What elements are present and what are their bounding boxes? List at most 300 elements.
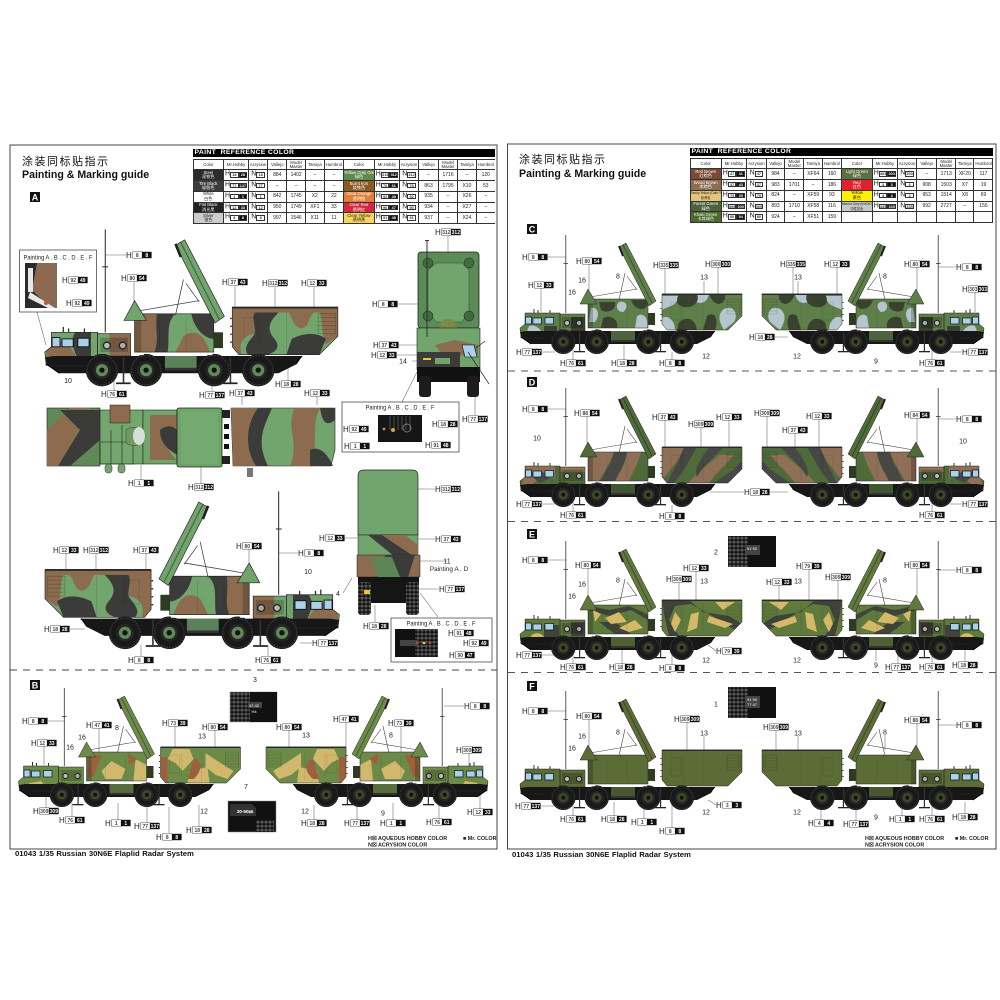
- paint chips: panel B: 8: [175, 835, 178, 841]
- paint chips: panel F: [515, 707, 982, 836]
- paint chips: panel E: 39: [814, 564, 820, 570]
- paint chips: panel B: 8: [166, 835, 169, 841]
- table: paint reference colors, left sheet: N: [402, 181, 407, 188]
- table: paint reference colors, left sheet: 11: [331, 215, 337, 221]
- table: paint reference colors, left sheet: 1: [260, 195, 262, 199]
- paint chips: panel C: 54: [922, 262, 928, 268]
- inset: rear detail: Painting A . B . C . D . E . F: [406, 620, 476, 628]
- table: paint reference colors, right sheet: N: [900, 191, 905, 198]
- paint chips: panel A: H: [301, 279, 307, 288]
- number callouts: [64, 274, 967, 822]
- paint chips: panel E: 79: [725, 649, 730, 655]
- table: paint reference colors, left sheet: 90: [383, 206, 387, 210]
- paint chips: panel C: H: [653, 261, 659, 270]
- paint chips: panel C: H: [749, 333, 755, 342]
- paint chips: panel A: 43: [391, 343, 397, 349]
- heading: left Chinese title: 涂装同标贴指示: [22, 156, 110, 168]
- paint chips: panel A: 37: [238, 391, 243, 397]
- table: paint reference colors, left sheet: –: [295, 183, 298, 189]
- table: paint reference colors, left sheet: N: [251, 203, 256, 210]
- inset: detail 1: 91 90: [747, 697, 758, 702]
- paint chips: panel E: 54: [593, 563, 599, 569]
- table: paint reference colors, left sheet: 轮胎色: [202, 185, 215, 190]
- paint chips: panel E: 309: [832, 575, 841, 581]
- paint chips: panel A: 8: [138, 658, 141, 664]
- table: paint reference colors, right sheet: Interior Grey (KHOKI): [842, 202, 872, 206]
- table: paint reference colors, left sheet: H: [225, 203, 230, 210]
- paint chips: panel D: [516, 405, 988, 521]
- table: paint reference colors, left sheet: 22: [331, 193, 337, 199]
- paint chips: panel F: 1: [641, 820, 644, 826]
- paint chips: panel B: 80: [285, 725, 290, 731]
- paint chips: panel A: 137: [456, 587, 464, 593]
- paint chips: panel D: H: [782, 426, 788, 435]
- paint chips: panel A: [44, 228, 489, 665]
- table: paint reference colors, left sheet: N: [251, 181, 256, 188]
- inset: front detail: [342, 402, 459, 452]
- table: paint reference colors, left sheet: Clear Yellow: [347, 213, 370, 218]
- paint chips: panel A: 37: [382, 343, 387, 349]
- number callouts: 10: [959, 438, 967, 446]
- paint chips: panel B: H: [156, 833, 162, 842]
- paint chips: panel C: 8: [966, 265, 969, 271]
- table: paint reference colors, right sheet: 186: [828, 182, 836, 188]
- table: paint reference colors, left sheet: Humbrol: [326, 162, 342, 167]
- table: paint reference colors, right sheet: 4: [908, 194, 911, 198]
- inset: detail 2: [728, 536, 776, 567]
- paint chips: panel A: H: [126, 251, 132, 260]
- paint chips: panel C: H: [919, 359, 925, 368]
- paint chips: panel F: 54: [922, 718, 928, 724]
- paint chips: panel A: 1: [147, 481, 150, 487]
- panel label E: E: [529, 529, 535, 539]
- paint chips: panel D: H: [744, 488, 750, 497]
- table: paint reference colors, right sheet: Model: [788, 159, 800, 164]
- paint chips: panel E: H: [825, 573, 831, 582]
- table: paint reference colors, left sheet: –: [313, 183, 316, 189]
- paint chips: panel C: 61: [578, 361, 584, 367]
- paint chips: panel C: H: [780, 260, 786, 269]
- paint chips: panel C: 335: [670, 263, 678, 269]
- paint chips: panel C: 8: [975, 265, 978, 271]
- table: paint reference colors, right sheet: N: [750, 170, 755, 177]
- table: paint reference colors, left sheet: [193, 149, 495, 224]
- table: paint reference colors, left sheet: 47: [392, 206, 396, 210]
- paint chips: panel C: 137: [979, 350, 987, 356]
- table: paint reference colors, left sheet: 120: [482, 172, 490, 178]
- paint chips: panel F: 76: [569, 817, 574, 823]
- paint chips: panel B: 1: [115, 821, 118, 827]
- table: paint reference colors, right sheet: 117: [979, 171, 987, 177]
- paint chips: panel A: H: [462, 415, 468, 424]
- paint chips: panel E: H: [885, 663, 891, 672]
- paint chips: panel F: H: [763, 723, 769, 732]
- paint chips: panel D: H: [904, 411, 910, 420]
- table: paint reference colors, right sheet: 992: [922, 203, 931, 209]
- table: paint reference colors, left sheet: 1546: [291, 215, 302, 221]
- truck: scheme A right side view: [45, 491, 339, 649]
- heading: left English title: Painting & Marking guide: [22, 169, 149, 181]
- table: paint reference colors, right sheet: 984: [771, 171, 780, 177]
- table: paint reference colors, left sheet: N: [251, 171, 256, 178]
- table: paint reference colors, left sheet: 1716: [442, 172, 454, 178]
- truck: scheme C left: [520, 235, 742, 354]
- paint chips: panel D: 12: [725, 415, 730, 421]
- panel label C: [527, 224, 537, 234]
- table: paint reference colors, right sheet: 绿色: [853, 173, 861, 178]
- table: paint reference colors, left sheet: X11: [311, 215, 319, 221]
- table: paint reference colors, left sheet: 12: [258, 206, 263, 210]
- paint chips: panel A: 91: [457, 631, 462, 637]
- table: paint reference colors, left sheet: Color: [354, 162, 364, 167]
- table: paint reference colors, left sheet: White: [203, 191, 214, 196]
- paint chips: panel D: 54: [592, 411, 598, 417]
- paint chips: panel A: 8: [147, 658, 150, 664]
- number callouts: 12: [793, 810, 801, 816]
- paint chips: panel F: 1: [899, 817, 902, 823]
- table: paint reference colors, left sheet: H: [225, 192, 230, 199]
- paint chips: panel A: H: [298, 549, 304, 558]
- paint chips: panel E: H: [904, 561, 910, 570]
- paint chips: panel A: H: [62, 276, 68, 285]
- table: paint reference colors, right sheet: 953: [922, 192, 931, 198]
- table: paint reference colors, right sheet: Red: [853, 180, 861, 185]
- number callouts: 8: [883, 730, 887, 736]
- paint chips: panel F: H: [952, 813, 958, 822]
- paint chips: panel B: H: [344, 819, 350, 828]
- table: paint reference colors, right sheet: 43: [739, 183, 743, 187]
- number callouts: 10: [304, 569, 312, 576]
- paint chips: panel B: H: [388, 719, 394, 728]
- truck: scheme F right: [762, 691, 984, 810]
- legend: panel B: N☒ ACRYSION COLOR: [368, 842, 427, 848]
- paint chips: panel E: H: [560, 663, 566, 672]
- paint chips: panel F: 309: [780, 725, 788, 731]
- paint chips: panel E: H: [952, 661, 958, 670]
- paint chips: panel E: H: [766, 578, 772, 587]
- number callouts: 13: [794, 274, 802, 282]
- table: paint reference colors, right sheet: Tamiya: [958, 161, 972, 166]
- table: paint reference colors, left sheet: 61: [392, 184, 396, 188]
- table: paint reference colors, left sheet: Color: [203, 162, 213, 167]
- table: paint reference colors, right sheet: 79: [757, 194, 761, 198]
- number callouts: 8: [616, 274, 620, 280]
- table: paint reference colors, right sheet: Tamiya: [806, 161, 820, 166]
- table: paint reference colors, right sheet: Model: [940, 159, 952, 164]
- table: paint reference colors, left sheet: N: [251, 214, 256, 221]
- paint chips: panel D: 8: [669, 514, 672, 520]
- table: paint reference colors, left sheet: H: [225, 181, 230, 188]
- table: paint reference colors, right sheet: XF20: [959, 171, 971, 177]
- paint chips: panel A: H: [101, 390, 107, 399]
- number callouts: 1: [714, 702, 718, 708]
- paint chips: panel E: 33: [701, 566, 707, 572]
- paint chips: panel E: H: [666, 575, 672, 584]
- paint chips: panel E: 309: [673, 577, 682, 583]
- paint chips: panel F: 309: [681, 717, 690, 723]
- paint chips: panel B: 41: [104, 723, 110, 729]
- paint chips: panel A: H: [371, 351, 377, 360]
- paint chips: panel A: 28: [450, 422, 456, 428]
- inset: detail 3: 47-42: [249, 703, 260, 708]
- paint chips: panel B: H: [186, 826, 192, 835]
- number callouts: 9: [874, 358, 878, 366]
- table: paint reference colors, left sheet: 烧铁色: [353, 185, 365, 190]
- table: paint reference colors, right sheet: 1514: [941, 192, 952, 198]
- table: paint reference colors, right sheet: X8: [962, 192, 968, 198]
- paint chips: panel A: 49: [361, 427, 367, 433]
- paint chips: panel E: 80: [913, 563, 918, 569]
- table: paint reference colors, right sheet: 335: [889, 205, 895, 209]
- table: paint reference colors, left sheet: 77: [232, 184, 236, 188]
- paint chips: panel D: 309: [695, 422, 704, 428]
- paint chips: panel F: H: [889, 815, 895, 824]
- table: paint reference colors, right sheet: PAINT REFERENCE COLOR: [692, 148, 791, 155]
- paint chips: panel C: 137: [533, 350, 541, 356]
- paint chips: panel D: 28: [762, 490, 768, 496]
- paint chips: panel D: H: [652, 413, 658, 422]
- table: paint reference colors, left sheet: Acrysion: [250, 162, 266, 167]
- table: paint reference colors, left sheet: 935: [424, 193, 433, 199]
- table: paint reference colors, left sheet: X24: [462, 215, 471, 221]
- paint chips: panel F: 309: [770, 725, 779, 731]
- paint chips: panel E: 8: [669, 666, 672, 672]
- table: paint reference colors, right sheet: 41: [739, 172, 743, 176]
- truck: scheme A left side view: [45, 229, 338, 386]
- paint chips: panel B: 309: [463, 748, 472, 754]
- table: paint reference colors, right sheet: H: [874, 202, 879, 209]
- table: paint reference colors, left sheet: Vallejo: [271, 162, 284, 167]
- paint chips: panel A: H: [229, 389, 235, 398]
- paint chips: panel F: 88: [913, 718, 918, 724]
- number callouts: 13: [700, 730, 708, 738]
- paint chips: panel A: H: [121, 274, 127, 283]
- table: paint reference colors, right sheet: XF59: [807, 192, 819, 198]
- table: paint reference colors, right sheet: 116: [828, 203, 836, 209]
- paint chips: panel A: 8: [391, 302, 394, 308]
- table: paint reference colors, right sheet: 160: [828, 171, 836, 177]
- table: paint reference colors, left sheet: Model: [290, 160, 302, 165]
- paint chips: panel D: 54: [922, 413, 928, 419]
- paint chips: panel A: H: [66, 299, 72, 308]
- table: paint reference colors, right sheet: 1713: [941, 171, 952, 177]
- table: paint reference colors, right sheet: Light Green: [846, 169, 868, 174]
- paint chips: panel E: 8: [541, 558, 544, 564]
- table: paint reference colors, left sheet: Mr.Hobby: [378, 162, 396, 167]
- table: paint reference colors, right sheet: N: [900, 202, 905, 209]
- paint chips: panel A: 76: [264, 658, 269, 664]
- paint chips: panel C: 8: [678, 361, 681, 367]
- paint chips: panel D: H: [806, 412, 812, 421]
- paint chips: panel A: 37: [231, 280, 236, 286]
- table: paint reference colors, left sheet: –: [313, 172, 316, 178]
- table: paint reference colors, right sheet: 37: [730, 183, 734, 187]
- table: paint reference colors, left sheet: 76: [409, 184, 414, 188]
- table: paint reference colors, left sheet: Acrysion: [401, 162, 417, 167]
- paint chips: panel C: 28: [629, 361, 635, 367]
- number callouts: 13: [700, 274, 708, 282]
- paint chips: panel C: 77: [971, 350, 976, 356]
- table: paint reference colors, left sheet: X26: [462, 193, 471, 199]
- paint chips: panel D: 137: [979, 502, 987, 508]
- table: paint reference colors, left sheet: N: [402, 214, 407, 221]
- paint chips: panel E: 76: [569, 665, 574, 671]
- paint chips: panel F: 28: [970, 815, 976, 821]
- number callouts: 14: [399, 358, 407, 366]
- paint chips: panel B: H: [134, 822, 140, 831]
- paint chips: panel E: 28: [627, 665, 633, 671]
- table: paint reference colors, left sheet: H: [376, 181, 381, 188]
- table: paint reference colors, right sheet: 79: [730, 194, 734, 198]
- paint chips: panel C: 303: [969, 287, 978, 293]
- table: paint reference colors, left sheet: 1402: [291, 172, 302, 178]
- table: paint reference colors, left sheet: Vallejo: [422, 162, 435, 167]
- table: paint reference colors, right sheet: 2727: [941, 203, 952, 209]
- paint chips: panel C: H: [904, 260, 910, 269]
- truck: scheme C right: [762, 235, 984, 354]
- paint chips: panel B: 137: [361, 821, 369, 827]
- number callouts: 16: [568, 746, 576, 752]
- table: paint reference colors, right sheet: 1701: [789, 182, 800, 188]
- table: paint reference colors, left sheet: 934: [424, 204, 433, 210]
- paint chips: panel C: 300: [712, 262, 721, 268]
- paint chips: panel F: 8: [541, 709, 544, 715]
- panel label C: C: [529, 224, 536, 234]
- paint chips: panel A: 312: [269, 281, 278, 287]
- number callouts: 13: [794, 730, 802, 738]
- dividers C/D/E/F: [508, 371, 996, 672]
- paint chips: panel A: 1: [363, 444, 366, 450]
- paint chips: panel A: H: [83, 546, 89, 555]
- paint chips: panel A: H: [44, 625, 50, 634]
- paint chips: panel E: 137: [902, 665, 910, 671]
- table: paint reference colors, left sheet: N: [402, 203, 407, 210]
- paint chips: panel F: H: [522, 707, 528, 716]
- table: paint reference colors, right sheet: –: [793, 171, 796, 177]
- paint chips: panel B: H: [162, 719, 168, 728]
- paint chips: panel A: H: [344, 442, 350, 451]
- table: paint reference colors, left sheet: 透明橙: [353, 196, 365, 201]
- paint chips: panel A: H: [435, 535, 441, 544]
- number callouts: 16: [578, 278, 586, 284]
- inset: detail 1: 77 47: [747, 702, 758, 707]
- paint chips: panel C: 33: [546, 283, 552, 289]
- paint chips: panel B: 61: [444, 820, 450, 826]
- number callouts: 16: [578, 582, 586, 588]
- paint chips: panel D: H: [560, 511, 566, 520]
- paint chips: panel C: H: [560, 359, 566, 368]
- table: paint reference colors, right sheet: Yellow: [851, 190, 863, 195]
- table: paint reference colors, left sheet: 28: [241, 173, 245, 177]
- paint chips: panel C: H: [576, 257, 582, 266]
- table: paint reference colors, left sheet: –: [466, 172, 468, 178]
- table: paint reference colors, left sheet: 银色: [204, 217, 212, 222]
- table: paint reference colors, left sheet: Clear Orange: [346, 191, 371, 196]
- paint chips: panel D: H: [919, 511, 925, 520]
- paint chips: panel B: 54: [220, 725, 226, 731]
- legend: panel F: H☒ AQUEOUS HOBBY COLOR: [865, 836, 944, 842]
- paint chips: panel F: H: [843, 820, 849, 829]
- table: paint reference colors, right sheet: 1710: [789, 203, 800, 209]
- paint chips: panel C: 61: [937, 361, 943, 367]
- table: paint reference colors, left sheet: Mr.Hobby: [227, 162, 245, 167]
- panel label A: [30, 192, 40, 202]
- number callouts: 13: [794, 578, 802, 586]
- number callouts: 13: [198, 734, 206, 740]
- number callouts: 12: [702, 658, 710, 664]
- paint chips: panel B: 8: [474, 704, 477, 710]
- paint chips: panel A: H: [463, 639, 469, 648]
- paint chips: panel D: 61: [578, 513, 584, 519]
- paint chips: panel D: 76: [569, 513, 574, 519]
- paint chips: panel A: H: [236, 542, 242, 551]
- heading: right Chinese title: 涂装同标贴指示: [519, 154, 606, 166]
- table: paint reference colors, left sheet: H: [376, 192, 381, 199]
- table: paint reference colors, left sheet: H: [225, 171, 230, 178]
- truck: scheme E left: [520, 541, 742, 660]
- table: paint reference colors, right sheet: Forest Green: [693, 201, 718, 206]
- paint chips: panel D: 33: [734, 415, 740, 421]
- table: paint reference colors, left sheet: H: [376, 203, 381, 210]
- table: paint reference colors, right sheet: 309: [729, 205, 735, 209]
- paint chips: panel E: 8: [966, 568, 969, 574]
- table: paint reference colors, right sheet: H: [874, 170, 879, 177]
- paint chips: panel B: 61: [77, 818, 83, 824]
- truck: scheme A top view: [47, 405, 335, 477]
- paint chips: panel A: 92: [71, 278, 76, 284]
- table: paint reference colors, right sheet: 303: [889, 172, 895, 176]
- table: paint reference colors, right sheet: 3: [891, 183, 893, 187]
- table: paint reference colors, left sheet: H: [376, 214, 381, 221]
- paint chips: panel A: H: [304, 389, 310, 398]
- paint chips: panel A: 12: [380, 353, 385, 359]
- legend: panel B: ■ Mr. COLOR: [463, 836, 497, 842]
- number callouts: 16: [66, 744, 74, 752]
- table: paint reference colors, right sheet: 80: [730, 215, 734, 219]
- paint chips: panel B: H: [86, 721, 92, 730]
- table: paint reference colors, right sheet: 309: [738, 205, 744, 209]
- paint chips: panel F: H: [674, 715, 680, 724]
- table: paint reference colors, left sheet: 1: [242, 195, 244, 199]
- paint chips: panel E: 18: [618, 665, 623, 671]
- paint chips: panel E: H: [919, 663, 925, 672]
- truck: scheme A front view: [417, 240, 489, 397]
- paint chips: panel F: 309: [691, 717, 699, 723]
- paint chips: panel B: 28: [204, 828, 210, 834]
- paint chips: panel F: 18: [610, 817, 615, 823]
- table: paint reference colors, right sheet: H: [723, 213, 728, 220]
- paint chips: panel B: 1: [399, 821, 402, 827]
- table: paint reference colors, right sheet: 156: [979, 203, 988, 209]
- paint chips: panel B: 33: [49, 741, 55, 747]
- table: paint reference colors, right sheet: 3: [882, 183, 884, 187]
- table: paint reference colors, right sheet: N: [750, 213, 755, 220]
- paint chips: panel A: 91: [434, 443, 439, 449]
- paint chips: panel F: 80: [585, 714, 590, 720]
- paint chips: panel A: 61: [119, 392, 125, 398]
- paint chips: panel F: H: [576, 712, 582, 721]
- table: paint reference colors, left sheet: 8: [260, 216, 262, 220]
- table: paint reference colors, left sheet: –: [447, 193, 449, 199]
- number callouts: 9: [381, 810, 385, 818]
- paint chips: panel F: 8: [669, 829, 672, 835]
- paint chips: panel A: 43: [247, 391, 253, 397]
- table: paint reference colors, left sheet: N: [251, 192, 256, 199]
- paint chips: panel A: 33: [71, 548, 77, 554]
- paint chips: panel A: H: [133, 546, 139, 555]
- table: paint reference colors, left sheet: N: [402, 192, 407, 199]
- table: paint reference colors, left sheet: 91: [409, 216, 414, 220]
